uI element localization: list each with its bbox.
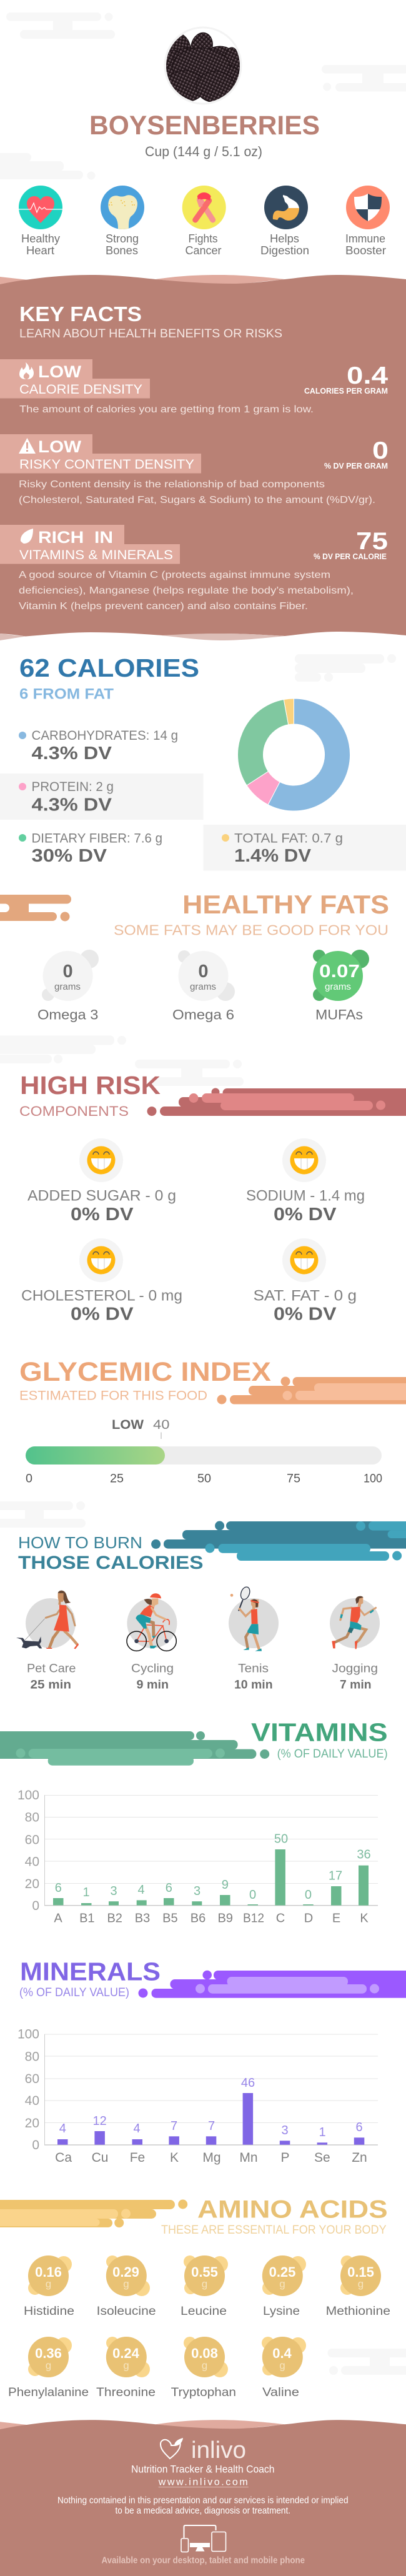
fact: rich in vitamins and minerals: VITAMINS & MINERALS (19, 548, 173, 562)
bar chart: vitamins: 9 (222, 1878, 229, 1892)
availability note: Available on your desktop, tablet and mobile phone (101, 2555, 305, 2566)
heading: HEALTHY FATS (182, 890, 389, 919)
panel: high risk components (19, 1071, 406, 1325)
isoleucine: 0.29 (112, 2264, 139, 2280)
tryptophan: Tryptophan (171, 2386, 236, 2399)
fact: risky content density: RISKY CONTENT DENSITY (19, 457, 194, 472)
icon: strong bones (101, 186, 144, 229)
valine: g (279, 2360, 285, 2372)
omega 6: grams (190, 982, 216, 992)
phenylalanine: 0.36 (35, 2345, 62, 2361)
histidine: 0.16 (35, 2264, 62, 2280)
bar chart: minerals: 7 (208, 2119, 215, 2133)
panel: key facts (0, 275, 406, 640)
omega 3: Omega 3 (37, 1007, 99, 1022)
activity labels: 7 min (340, 1678, 371, 1692)
omega 6: Omega 6 (172, 1007, 234, 1022)
mufas: 0.07 (319, 962, 360, 982)
bar chart: minerals: Se (314, 2151, 330, 2165)
fact: risky content density: Risky Content density is the relationship of bad components (19, 479, 325, 490)
sodium: 0% DV (274, 1205, 337, 1225)
phenylalanine: Phenylalanine (8, 2386, 89, 2399)
bar chart: minerals: Fe (130, 2151, 145, 2165)
bar chart: vitamins: B12 (243, 1911, 264, 1925)
heading: key facts: KEY FACTS (19, 302, 142, 326)
isoleucine (97, 2255, 156, 2318)
bar chart: vitamins: 60 (25, 1833, 39, 1847)
fact: calorie density (0, 359, 388, 415)
subheading: COMPONENTS (19, 1103, 129, 1119)
bar chart: minerals: 7 (171, 2119, 177, 2133)
omega 6: 0 (198, 962, 209, 982)
activity labels: Tenis (238, 1662, 269, 1675)
icon: healthy heart (19, 186, 62, 229)
bar chart: minerals: Cu (92, 2151, 108, 2165)
icon labels: Strong (106, 232, 139, 245)
activity labels: 25 min (30, 1678, 71, 1692)
added sugar: ADDED SUGAR - 0 g (27, 1187, 176, 1204)
valine: Valine (262, 2386, 299, 2399)
heading line 2: THOSE CALORIES (18, 1553, 204, 1573)
bar chart: minerals (17, 2027, 378, 2165)
subheading: (% OF DAILY VALUE) (277, 1748, 388, 1761)
gauge: 100 (364, 1472, 382, 1486)
activity: tennis (229, 1586, 279, 1651)
serving size: Cup (144 g / 5.1 oz) (145, 144, 262, 159)
logo (161, 2437, 246, 2464)
bar chart: minerals: 60 (25, 2072, 39, 2086)
icon labels: Fights (189, 232, 217, 245)
bar chart: vitamins: K (360, 1911, 369, 1925)
decorative blob (0, 895, 71, 921)
bar chart: minerals: 12 (92, 2114, 107, 2128)
disclaimer (57, 2495, 349, 2516)
logo: inlivo (191, 2437, 246, 2464)
lysine: 0.25 (269, 2264, 295, 2280)
icon labels (21, 232, 386, 257)
bar chart: vitamins: 3 (110, 1884, 117, 1898)
decorative blob (151, 1521, 406, 1561)
bar chart: vitamins: 100 (17, 1788, 39, 1803)
legend: carbohydrates: CARBOHYDRATES: 14 g (31, 729, 178, 743)
disclaimer: Nothing contained in this presentation and our services is intended or implied (57, 2495, 349, 2506)
phenylalanine (8, 2337, 89, 2399)
heading line 1: HOW TO BURN (18, 1533, 142, 1552)
leucine: Leucine (181, 2305, 227, 2318)
fact: calorie density: CALORIES PER GRAM (304, 387, 388, 395)
bar chart: minerals: 20 (25, 2116, 39, 2131)
decorative blob (0, 2199, 187, 2227)
icon labels: Bones (106, 244, 138, 257)
activity labels: 10 min (234, 1678, 273, 1692)
bar chart: vitamins: 80 (25, 1811, 39, 1825)
fact: rich in vitamins and minerals: RICH IN (38, 528, 113, 547)
icon: helps digestion (264, 186, 308, 229)
bar chart: minerals: 80 (25, 2050, 39, 2064)
icon labels: Immune (345, 232, 385, 245)
legend: dietary fiber: 30% DV (31, 846, 107, 866)
gauge: 75 (287, 1472, 300, 1486)
legend: total fat: TOTAL FAT: 0.7 g (234, 832, 343, 846)
bar chart: minerals: 0 (32, 2138, 39, 2152)
bar chart: vitamins: B6 (191, 1911, 205, 1925)
activity labels: Jogging (332, 1662, 378, 1675)
bar chart: vitamins: 0 (305, 1888, 312, 1902)
mufas: MUFAs (315, 1007, 363, 1022)
sodium: SODIUM - 1.4 mg (246, 1187, 365, 1204)
bar chart: minerals: K (170, 2151, 179, 2165)
decorative blob (217, 1377, 406, 1405)
saturated fat: SAT. FAT - 0 g (254, 1287, 357, 1304)
bar chart: vitamins: D (304, 1911, 313, 1925)
icon labels: Booster (345, 244, 386, 257)
isoleucine: g (123, 2278, 129, 2290)
subheading: SOME FATS MAY BE GOOD FOR YOU (114, 922, 389, 938)
cholesterol: CHOLESTEROL - 0 mg (21, 1287, 182, 1304)
gauge: LOW (112, 1418, 144, 1432)
donut chart (238, 699, 350, 811)
subheading: from fat: 6 FROM FAT (19, 686, 114, 702)
lysine (262, 2255, 306, 2318)
omega 6 (172, 950, 235, 1022)
bar chart: vitamins: 20 (25, 1877, 39, 1891)
fact: rich in vitamins and minerals: Vitamin K (helps prevent cancer) and also contains Fiber. (19, 601, 308, 612)
histidine: g (46, 2278, 51, 2290)
heading: MINERALS (20, 1957, 161, 1986)
cholesterol (21, 1238, 182, 1325)
fact: rich in vitamins and minerals: A good source of Vitamin C (protects against immune system (19, 570, 330, 580)
fact: risky content density (0, 434, 389, 505)
decorative blob (0, 1731, 269, 1766)
isoleucine: Isoleucine (97, 2305, 156, 2318)
fact: rich in vitamins and minerals: % DV PER CALORIE (314, 552, 387, 561)
sodium (246, 1138, 365, 1225)
gauge (26, 1418, 382, 1486)
icon: leaf (21, 529, 33, 544)
bar chart: vitamins: 1 (82, 1886, 90, 1899)
tagline: Nutrition Tracker & Health Coach (131, 2464, 275, 2475)
added sugar: 0% DV (71, 1205, 134, 1225)
icon: fights cancer (182, 186, 226, 229)
heading: GLYCEMIC INDEX (19, 1357, 271, 1387)
bar chart: minerals: 100 (17, 2027, 39, 2042)
added sugar (27, 1138, 176, 1225)
leucine: g (202, 2278, 207, 2290)
legend: protein: 4.3% DV (31, 795, 112, 815)
cholesterol: 0% DV (71, 1305, 134, 1325)
heading: AMINO ACIDS (197, 2196, 388, 2223)
bar chart: vitamins: 6 (55, 1881, 62, 1895)
activity: cycling (127, 1593, 177, 1651)
tryptophan (171, 2337, 236, 2399)
panel: footer (0, 2420, 406, 2576)
bar chart: vitamins: 0 (249, 1888, 256, 1902)
subheading: THESE ARE ESSENTIAL FOR YOUR BODY (161, 2224, 387, 2237)
gauge: 0 (26, 1472, 32, 1486)
panel: glycemic index (19, 1357, 406, 1486)
bar chart: vitamins: A (54, 1911, 62, 1925)
tryptophan: 0.08 (191, 2345, 218, 2361)
bar chart: minerals: P (280, 2151, 290, 2165)
bar chart: vitamins: E (332, 1911, 340, 1925)
bar chart: vitamins: 40 (25, 1854, 39, 1869)
bar chart: minerals: 40 (25, 2094, 39, 2108)
gauge: 25 (110, 1472, 124, 1486)
icon labels: Digestion (260, 244, 309, 257)
activity labels: 9 min (136, 1678, 169, 1692)
bar chart: vitamins: 36 (357, 1848, 371, 1862)
icon: immune booster (346, 186, 390, 229)
panel: minerals (17, 1957, 406, 2165)
panel: calories (0, 654, 406, 871)
legend: total fat (204, 825, 406, 871)
bar chart: minerals: 4 (133, 2122, 141, 2136)
legend: dietary fiber: DIETARY FIBER: 7.6 g (31, 832, 162, 846)
fact: risky content density: 0 (372, 437, 389, 464)
bar chart: minerals: 1 (319, 2126, 326, 2139)
fact: risky content density: % DV PER GRAM (324, 462, 388, 470)
lysine: Lysine (263, 2305, 300, 2318)
activity: pet care (16, 1591, 79, 1649)
fact: calorie density: The amount of calories you are getting from 1 gram is low. (19, 404, 314, 415)
bar chart: vitamins: 50 (274, 1833, 288, 1846)
bar chart: minerals: 4 (59, 2122, 66, 2136)
leucine (181, 2255, 228, 2318)
panel: how to burn those calories (16, 1521, 406, 1692)
bar chart: minerals: Zn (352, 2151, 367, 2165)
bar chart: vitamins: B5 (162, 1911, 178, 1925)
histidine (24, 2255, 74, 2318)
saturated fat: 0% DV (274, 1305, 337, 1325)
mufas (313, 950, 369, 1022)
panel: vitamins (0, 1718, 388, 1925)
heading: HIGH RISK (20, 1071, 161, 1100)
valine (262, 2337, 306, 2399)
activity: jogging (330, 1596, 380, 1649)
bar chart: vitamins: 17 (329, 1869, 342, 1883)
fact: rich in vitamins and minerals: 75 (356, 528, 388, 555)
fact: risky content density: (Cholesterol, Saturated Fat, Sugars & Sodium) to the amount (%DV/gr). (19, 495, 375, 505)
bar chart: vitamins: 4 (137, 1883, 145, 1897)
activity labels: Cycling (131, 1662, 174, 1675)
icon: warning (19, 438, 36, 454)
threonine (96, 2337, 156, 2399)
phenylalanine: g (46, 2360, 51, 2372)
legend: carbohydrates (19, 729, 178, 763)
subheading: (% OF DAILY VALUE) (19, 1986, 129, 1999)
icon labels: Healthy (21, 232, 60, 245)
fact: calorie density: CALORIE DENSITY (19, 382, 142, 397)
bar chart: vitamins: 6 (166, 1881, 172, 1895)
title: BOYSENBERRIES (89, 111, 320, 141)
decorative blob (147, 1088, 406, 1116)
omega 3 (37, 950, 99, 1022)
histidine: Histidine (24, 2305, 74, 2318)
legend: protein: PROTEIN: 2 g (31, 780, 114, 794)
legend: carbohydrates: 4.3% DV (31, 743, 112, 763)
gauge: 40 (153, 1418, 170, 1432)
legend: protein (0, 773, 204, 820)
threonine: Threonine (96, 2386, 156, 2399)
icon: devices (181, 2525, 226, 2552)
health benefit icons (19, 186, 390, 257)
legend: total fat: 1.4% DV (234, 846, 312, 866)
bar chart: vitamins: C (276, 1911, 285, 1925)
tryptophan: g (202, 2360, 207, 2372)
decorative blob (139, 1971, 406, 1998)
gauge: 50 (197, 1472, 211, 1486)
leucine: 0.55 (191, 2264, 218, 2280)
panel: healthy fats (0, 890, 389, 1022)
bar chart: vitamins: B1 (79, 1911, 95, 1925)
threonine: g (123, 2360, 129, 2372)
threonine: 0.24 (112, 2345, 140, 2361)
lysine: g (279, 2278, 285, 2290)
heading: 62 calories: 62 CALORIES (19, 654, 199, 682)
methionine: g (358, 2278, 364, 2290)
fact: calorie density: 0.4 (347, 362, 388, 389)
bar chart: vitamins: B9 (217, 1911, 233, 1925)
heading: VITAMINS (251, 1718, 388, 1746)
bar chart: vitamins: 3 (194, 1884, 201, 1898)
bar chart: minerals: Ca (55, 2151, 72, 2165)
website: www.inlivo.com (158, 2477, 248, 2488)
fact: risky content density: LOW (38, 437, 82, 456)
methionine: 0.15 (347, 2264, 374, 2280)
bar chart: vitamins: 0 (32, 1899, 39, 1913)
header: food photo and title (89, 27, 320, 159)
fact: rich in vitamins and minerals: deficiencies), Manganese (helps regulate the body’s metabolism), (19, 585, 354, 596)
food photo: boysenberries (164, 27, 241, 104)
subheading: LEARN ABOUT HEALTH BENEFITS OR RISKS (19, 327, 282, 341)
fact: rich in vitamins and minerals (0, 525, 388, 612)
omega 3: grams (54, 982, 81, 992)
activity labels: Pet Care (27, 1662, 76, 1675)
icon labels: Helps (270, 232, 299, 245)
methionine: Methionine (326, 2305, 390, 2318)
disclaimer: to be a medical advice, diagnosis or treatment. (115, 2505, 290, 2516)
panel: amino acids (0, 2196, 390, 2399)
mufas: grams (325, 982, 351, 992)
legend: dietary fiber (19, 832, 162, 866)
omega 3: 0 (63, 962, 73, 982)
icon labels: Cancer (185, 244, 221, 257)
activity labels (27, 1662, 378, 1692)
valine: 0.4 (272, 2345, 292, 2361)
bar chart: vitamins (17, 1788, 378, 1925)
bar chart: minerals: Mn (239, 2151, 258, 2165)
icon labels: Heart (26, 244, 54, 257)
icon: flame (19, 362, 34, 379)
saturated fat (254, 1238, 357, 1325)
bar chart: minerals: 6 (355, 2121, 363, 2134)
bar chart: minerals: Mg (202, 2151, 221, 2165)
bar chart: minerals: 3 (281, 2124, 289, 2137)
methionine (326, 2255, 390, 2318)
bar chart: minerals: 46 (241, 2076, 255, 2090)
fact: calorie density: LOW (38, 362, 82, 381)
subheading: ESTIMATED FOR THIS FOOD (19, 1388, 207, 1403)
bar chart: vitamins: B3 (135, 1911, 150, 1925)
bar chart: vitamins: B2 (107, 1911, 122, 1925)
